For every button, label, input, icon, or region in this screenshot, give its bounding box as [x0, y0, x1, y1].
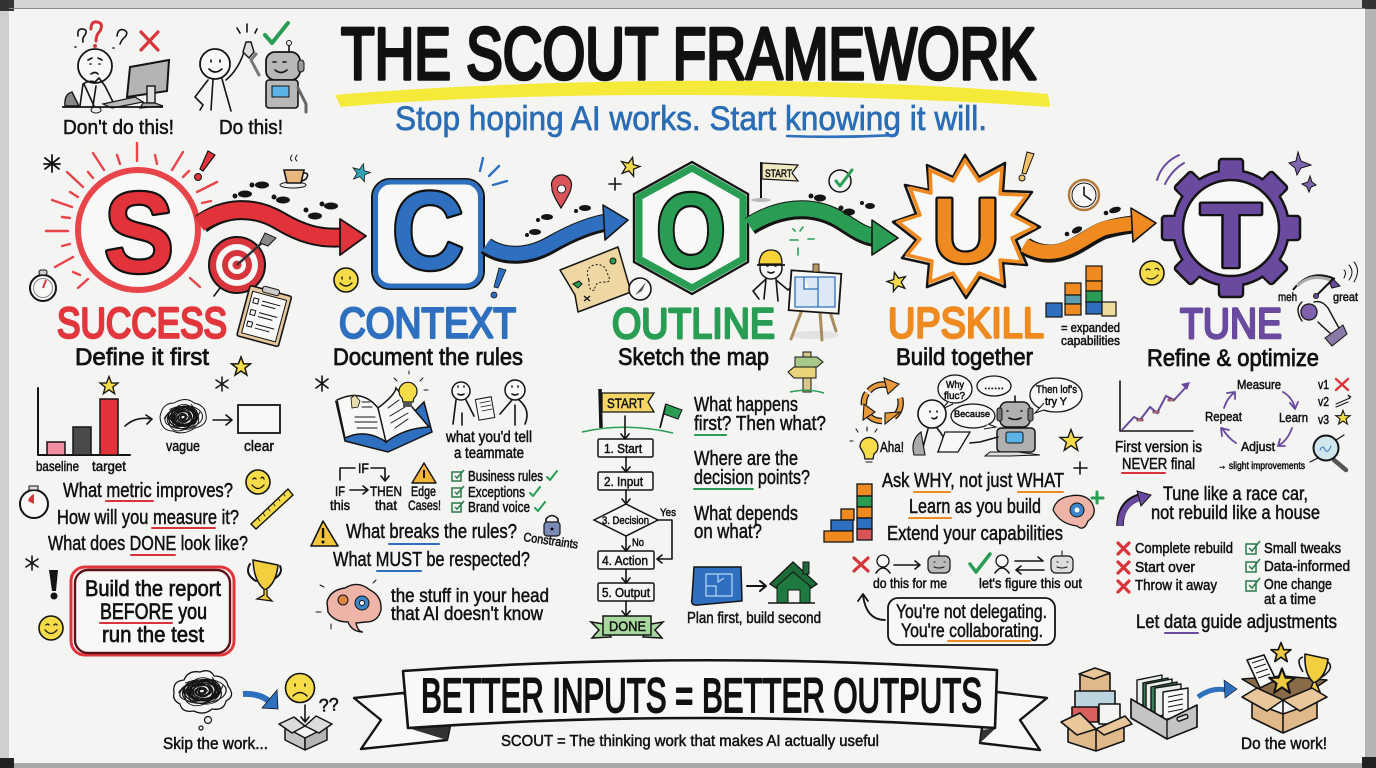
- icon: block towers expanded: [1046, 266, 1116, 317]
- heading: UPSKILL: UPSKILL: [888, 300, 1044, 348]
- heading: TUNE: TUNE: [1180, 300, 1282, 348]
- callout: build the report before: BEFORE you: [100, 599, 207, 624]
- icon: sad face with empty box: ??: [318, 694, 340, 716]
- icon: cycle arrows: [863, 378, 901, 424]
- flowchart: start to done: No: [632, 537, 644, 549]
- start flag: [600, 389, 601, 428]
- label: do the work: Do the work!: [1241, 734, 1327, 753]
- subtitle: Stop hoping AI works. Start knowing it will.: [395, 100, 987, 138]
- icon: warning triangle: [311, 521, 338, 546]
- icon: asterisk small: [216, 377, 228, 391]
- title banner: [335, 14, 1050, 138]
- icon: plus: [1074, 462, 1087, 474]
- callout: build the report before: run the test: [102, 622, 204, 647]
- diagram: measure learn adjust repeat cycle: [1205, 377, 1308, 472]
- diagram: measure learn adjust repeat cycle: Adjust: [1241, 439, 1275, 454]
- text block: outline questions: Where are the: [694, 447, 798, 470]
- letter S: S: [104, 170, 174, 297]
- versions list v1 v2 v3: [1318, 377, 1351, 427]
- text block: first version: NEVER final: [1122, 456, 1195, 473]
- text block: stuff in your head: that AI doesn't know: [391, 604, 543, 625]
- U letter badge starburst: [893, 155, 1040, 298]
- yellow highlight swoosh: [335, 81, 1050, 107]
- label: do this: Do this!: [219, 117, 283, 139]
- checklist: business rules, exceptions, brand voice: Exceptions: [468, 485, 525, 501]
- icon: footprints green path: [808, 194, 875, 216]
- icon: brain with gears: [316, 580, 381, 632]
- banner: better inputs equals better outputs: [354, 660, 1047, 750]
- icon: start flag small: [751, 162, 798, 202]
- arrow: purple curved: [1120, 491, 1151, 526]
- title: THE SCOUT FRAMEWORK: [341, 14, 1036, 95]
- icon: treasure map and compass: [560, 247, 651, 312]
- icon: edge cases warning: Cases!: [408, 497, 441, 513]
- icon: footprints blue path: [525, 205, 591, 237]
- arrow: success to context: [199, 210, 366, 255]
- icon: star near hexagon: [619, 155, 642, 177]
- icon: blue sparks: [480, 158, 507, 185]
- icon: edge cases warning: Edge: [411, 483, 436, 499]
- versions list v1 v2 v3: v3: [1318, 412, 1329, 427]
- icon: start flag small: START: [765, 168, 792, 180]
- arrow: context to outline: [486, 205, 628, 255]
- icon: wink smiley: [246, 470, 270, 494]
- icon: magnifying glass: [1310, 435, 1346, 470]
- text block: first version: First version is: [1115, 439, 1202, 456]
- arrow: outline to upskill: [749, 209, 898, 255]
- icon: skip the work scribble cloud: [174, 671, 232, 730]
- icon: aha bulb: Aha!: [880, 440, 904, 456]
- person: [918, 400, 946, 428]
- icon: trophy: [248, 560, 281, 601]
- icon: wink smiley near tune: [1140, 261, 1164, 285]
- icon: clock: [1069, 180, 1099, 210]
- text block: context questions: What MUST be respected?: [333, 548, 530, 571]
- subheading: document the rules: Document the rules: [333, 344, 523, 371]
- icon: stopwatch top: [30, 270, 56, 301]
- label: don't do this: Don't do this!: [63, 117, 174, 139]
- text block: outline questions: What depends: [694, 502, 798, 525]
- diagram: if then flow: this: [330, 497, 350, 513]
- list: do's: [1246, 540, 1350, 608]
- label: what you'd tell a teammate: [445, 429, 532, 462]
- flowchart: start to done: 1. Start: [604, 441, 642, 456]
- tagline: SCOUT = The thinking work that makes AI actually useful: [501, 733, 879, 750]
- diagram: vague to clear: [125, 399, 280, 455]
- list: do's: Small tweaks: [1264, 540, 1341, 557]
- subtitle underline: [787, 135, 895, 137]
- callout: not delegating: You're collaborating.: [901, 621, 1043, 642]
- diagram: vague to clear: clear: [244, 439, 274, 455]
- icon: teal star: [350, 161, 372, 183]
- diagram: vague to clear: vague: [166, 439, 200, 455]
- robot: [1000, 402, 1030, 427]
- subheading: sketch the map: Sketch the map: [618, 344, 769, 371]
- icon: purple motion arcs: [1157, 155, 1184, 184]
- icon: edge cases warning: [408, 463, 441, 513]
- text block: first version: [1115, 439, 1202, 473]
- illustration: person and robot collaborating: Then lof's: [1036, 384, 1077, 396]
- icon: stack of boxes: [1061, 668, 1132, 751]
- arrow: blue to do the work: [1198, 680, 1237, 698]
- icon: brain with gear: [1053, 492, 1103, 528]
- checklist: business rules, exceptions, brand voice: Brand voice: [468, 500, 530, 516]
- text block: outline questions: What happens: [694, 393, 798, 416]
- text block: upskill points: [882, 469, 1064, 545]
- letter O: O: [656, 172, 726, 290]
- text: let data guide adjustments: Let data guide adjustments: [1136, 612, 1337, 633]
- checklist: business rules, exceptions, brand voice: Business rules: [468, 469, 543, 485]
- letter C: C: [392, 170, 464, 293]
- icon: red exclamation: [194, 151, 215, 180]
- S letter badge with sun rays: [46, 143, 217, 297]
- icon: don't do this, confused person at computer: [62, 22, 169, 113]
- label: expanded capabilities: capabilities: [1061, 333, 1120, 348]
- icon: star below burst: [885, 270, 908, 292]
- checklist: business rules, exceptions, brand voice: [452, 469, 557, 516]
- text block: outline questions: decision points?: [694, 466, 810, 489]
- diagram: let's figure this out (green check): let's figure this out: [979, 575, 1082, 591]
- icon: coffee cup: [280, 155, 308, 188]
- arrow: blue curved to empty box: [243, 690, 278, 709]
- bar chart: baseline to target: target: [92, 458, 126, 474]
- list: don'ts: Complete rebuild: [1135, 540, 1233, 557]
- icon: ruler: [251, 489, 293, 529]
- text block: race car: Tune like a race car,: [1163, 484, 1308, 505]
- subheading: refine and optimize: Refine & optimize: [1147, 345, 1319, 372]
- flowchart: start to done: 4. Action: [602, 553, 648, 568]
- icon: open book with bulb: [316, 371, 432, 452]
- bar chart: baseline to target: [36, 376, 130, 474]
- text block: stuff in your head: [391, 586, 549, 625]
- icon: smiley near C: [334, 268, 358, 292]
- icon: green check in circle: [829, 170, 852, 192]
- icon: sad face with empty box: [279, 674, 340, 750]
- gauge: meh to great dial: [1278, 262, 1359, 346]
- heading: CONTEXT: CONTEXT: [339, 300, 516, 348]
- list: don'ts: [1118, 540, 1233, 594]
- icon: clipboard checklist: [237, 283, 292, 347]
- icon: yellow star: [1060, 430, 1082, 450]
- diagram: if then flow: IF: [335, 483, 345, 499]
- label: expanded capabilities: = expanded: [1061, 320, 1120, 335]
- illustration: person and robot collaborating: ......: [984, 381, 1004, 392]
- C letter badge: [372, 170, 484, 293]
- diagram: measure learn adjust repeat cycle: Measure: [1237, 377, 1281, 392]
- heading: OUTLINE: OUTLINE: [612, 300, 775, 348]
- text block: upskill points: Learn as you build: [909, 495, 1041, 518]
- diagram: measure learn adjust repeat cycle: → slight improvements: [1218, 460, 1305, 472]
- icon: stopwatch left: [20, 486, 48, 518]
- list: do's: at a time: [1264, 591, 1316, 608]
- diagram: if then flow: IF: [358, 460, 369, 476]
- callout: not delegating: [888, 598, 1055, 645]
- banner: better inputs equals better outputs: BETTER INPUTS = BETTER OUTPUTS: [421, 670, 982, 723]
- icon: asterisk: [26, 556, 38, 570]
- icon: purple sparkle stars: [1289, 152, 1316, 192]
- text block: success questions: What does DONE look like?: [48, 532, 248, 555]
- text block: outline questions: first? Then what?: [694, 412, 826, 435]
- icon: target with arrow: [209, 233, 276, 296]
- versions list v1 v2 v3: v2: [1318, 394, 1329, 409]
- callout: not delegating: You're not delegating.: [896, 602, 1047, 623]
- arrow: curved to callout: [858, 594, 885, 620]
- diagram: if then flow: [330, 460, 402, 513]
- done banner: [591, 622, 663, 638]
- T letter badge gear: [1162, 159, 1300, 297]
- illustration: person and robot collaborating: fluc?: [944, 391, 965, 402]
- text block: outline questions: [694, 393, 826, 543]
- icon: do this, person high-fiving robot: [195, 23, 306, 112]
- subheading: define it first: Define it first: [75, 344, 209, 371]
- text block: context questions: [333, 520, 530, 571]
- icon: block towers large: [824, 484, 872, 542]
- icon: two people exchanging document: [452, 380, 527, 425]
- icon: asterisk: [44, 155, 60, 172]
- flow steps: [594, 439, 658, 601]
- text block: outline questions: on what?: [694, 520, 762, 543]
- label: plan first build second: Plan first, build second: [687, 610, 821, 627]
- chart: growth line: [1120, 381, 1193, 431]
- icon: lock: [544, 516, 560, 536]
- letter U: U: [932, 180, 1000, 282]
- icon: orange exclamation: [1019, 152, 1034, 181]
- list: don'ts: Throw it away: [1135, 577, 1217, 594]
- text block: success questions: [48, 479, 248, 555]
- icon: black exclamation: [49, 570, 58, 600]
- O letter badge hexagon: [634, 162, 748, 294]
- arrow: upskill to tune: [1024, 208, 1156, 254]
- icon: aha bulb: [850, 427, 904, 462]
- list: don'ts: Start over: [1135, 559, 1195, 576]
- diagram: if then flow: that: [375, 497, 397, 513]
- icon: map pin: [552, 175, 572, 208]
- icon: green sparks: [790, 227, 814, 255]
- sun rays: [46, 143, 217, 288]
- list: do's: Data-informed: [1264, 558, 1350, 575]
- illustration: person and robot collaborating: Because: [954, 409, 990, 420]
- list: do's: One change: [1264, 576, 1332, 593]
- illustration: person and robot collaborating: [913, 375, 1082, 456]
- subheading: build together: Build together: [896, 344, 1033, 371]
- flowchart: start to done: 5. Output: [602, 585, 650, 600]
- icon: open box with stars, paper, trophy: [1242, 642, 1330, 733]
- label: what you'd tell a teammate: a teammate: [454, 445, 524, 462]
- icon: blue exclamation: [491, 268, 506, 298]
- flowchart: start to done: [582, 389, 682, 638]
- letter T: T: [1200, 185, 1262, 287]
- icon: blueprint to house: [692, 562, 817, 605]
- text block: upskill points: Extend your capabilities: [887, 522, 1063, 545]
- callout: build the report before: Build the report: [85, 576, 221, 601]
- text block: upskill points: Ask WHY, not just WHAT: [882, 469, 1064, 492]
- icon: builder with blueprint on easel: [753, 250, 841, 340]
- icon: smiley lower left: [39, 616, 63, 640]
- flowchart: start to done: DONE: [609, 618, 646, 634]
- text block: race car: [1151, 484, 1320, 524]
- heading: SUCCESS: SUCCESS: [57, 300, 227, 348]
- icon: footprints orange path: [1065, 206, 1122, 236]
- callout: build the report before: [71, 567, 234, 655]
- speech bubbles: [938, 375, 972, 403]
- label: what you'd tell a teammate: what you'd tell: [445, 429, 532, 446]
- text block: stuff in your head: the stuff in your head: [391, 586, 549, 607]
- label: constraints: Constraints: [523, 530, 579, 552]
- icon: star below target: [232, 357, 250, 375]
- text block: success questions: How will you measure it?: [57, 506, 239, 529]
- diagram: do this for me (red x): [854, 551, 950, 591]
- flowchart: start to done: 2. Input: [604, 474, 643, 489]
- text block: success questions: What metric improves?: [63, 479, 233, 502]
- diagram: measure learn adjust repeat cycle: Learn: [1279, 410, 1308, 425]
- flowchart: start to done: Yes: [660, 507, 676, 519]
- label: skip the work: Skip the work...: [163, 734, 268, 753]
- icon: signpost: [788, 352, 824, 393]
- ring: [78, 170, 198, 290]
- illustration: person and robot collaborating: try Y: [1045, 396, 1068, 408]
- illustration: person and robot collaborating: Why: [946, 380, 964, 391]
- icon: file tray: [1131, 675, 1197, 739]
- gauge: meh to great dial: great: [1333, 290, 1359, 304]
- gauge: meh to great dial: meh: [1278, 290, 1297, 304]
- diagram: if then flow: THEN: [370, 483, 402, 499]
- diagram: measure learn adjust repeat cycle: Repeat: [1205, 409, 1242, 424]
- versions list v1 v2 v3: v1: [1318, 377, 1329, 392]
- icon: plus: [609, 178, 621, 190]
- flowchart: start to done: 3. Decision: [602, 515, 649, 527]
- label: expanded capabilities: [1061, 320, 1120, 348]
- diagram: let's figure this out (green check): [970, 551, 1082, 591]
- bar chart: baseline to target: baseline: [36, 458, 79, 474]
- icon: footprints red path: [232, 182, 338, 220]
- diagram: do this for me (red x): do this for me: [873, 575, 947, 591]
- text block: race car: not rebuild like a house: [1151, 503, 1320, 524]
- text block: context questions: What breaks the rules?: [346, 520, 517, 543]
- flowchart: start to done: START: [607, 395, 644, 411]
